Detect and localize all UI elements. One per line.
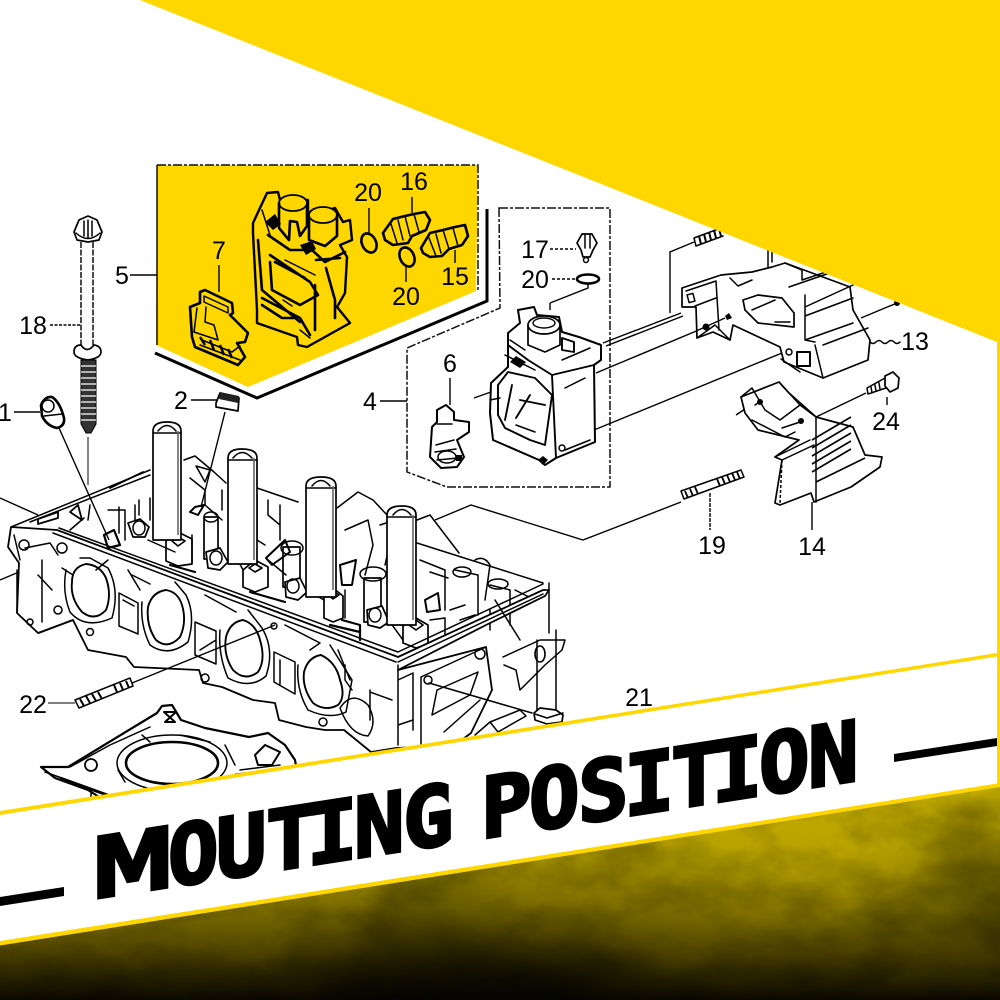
part number labels: 20 [354, 179, 382, 207]
yellow corner triangle [140, 0, 1000, 785]
right support arm and foot [495, 600, 565, 724]
part 13 bracket [682, 250, 900, 378]
part 20 washers [358, 231, 418, 269]
part number labels: 2 [174, 387, 188, 415]
part 18 long bolt [50, 216, 102, 485]
part number labels: 20 [521, 266, 549, 294]
part 2 valve cap [191, 392, 239, 507]
part number labels: 7 [212, 237, 226, 265]
part number labels: 6 [443, 350, 457, 378]
part number labels: 4 [363, 388, 377, 416]
banner right dash [894, 738, 997, 762]
banner title: POSITION [481, 703, 859, 859]
connecting leader lines [0, 242, 782, 580]
white diagonal banner [0, 654, 1000, 943]
part 17 bolt [577, 234, 597, 262]
spark plug tubes [153, 422, 416, 625]
banner left dash [0, 887, 64, 906]
part number labels: 19 [698, 532, 726, 560]
part 5 solenoid block [253, 192, 352, 347]
yellow panel leaders [130, 197, 455, 292]
part 19 stud [681, 470, 744, 530]
part 16 sensor [383, 212, 430, 245]
part number labels: 14 [798, 533, 826, 561]
part 22 stud [48, 623, 277, 708]
part number labels: 22 [19, 691, 47, 719]
right edge yellow strip [997, 654, 1000, 787]
part 6 gasket [430, 378, 469, 468]
part number labels: 18 [19, 312, 47, 340]
banner title: OUTING [168, 765, 454, 907]
part number labels [0, 168, 929, 719]
cylinder head [8, 422, 565, 752]
part 20 washer, box 4 [550, 249, 599, 284]
intake ports [65, 558, 352, 716]
part number labels: 13 [901, 328, 929, 356]
part number labels: 15 [441, 263, 469, 291]
banner bottom yellow line [0, 783, 1000, 946]
dashed box: part 4 assembly [407, 208, 610, 487]
part number labels: 16 [400, 168, 428, 196]
part 15 sensor [421, 225, 468, 257]
part number labels: 24 [872, 408, 900, 436]
part 14 bracket [741, 382, 882, 530]
part number labels: 21 [625, 684, 653, 712]
stud at part 13 [694, 228, 723, 246]
part 4 label leader [380, 400, 407, 402]
head interior: valves and bosses [38, 466, 535, 648]
banner title: M [91, 809, 175, 919]
part 1 valve seal [14, 397, 109, 540]
banner top yellow line [0, 652, 1000, 815]
highlighted yellow panel: part 5 assembly [130, 165, 487, 398]
part 7 gasket [190, 290, 248, 365]
part 4 solenoid body [490, 283, 601, 465]
head gasket [41, 705, 300, 810]
part number labels: 17 [521, 236, 549, 264]
part number labels: 5 [115, 262, 129, 290]
smoke background at bottom [0, 780, 1000, 1000]
port windows [96, 560, 320, 694]
head deck and ports [8, 527, 549, 752]
part 24 bolt [816, 372, 899, 417]
part number labels: 20 [392, 283, 420, 311]
right end face [340, 647, 532, 745]
